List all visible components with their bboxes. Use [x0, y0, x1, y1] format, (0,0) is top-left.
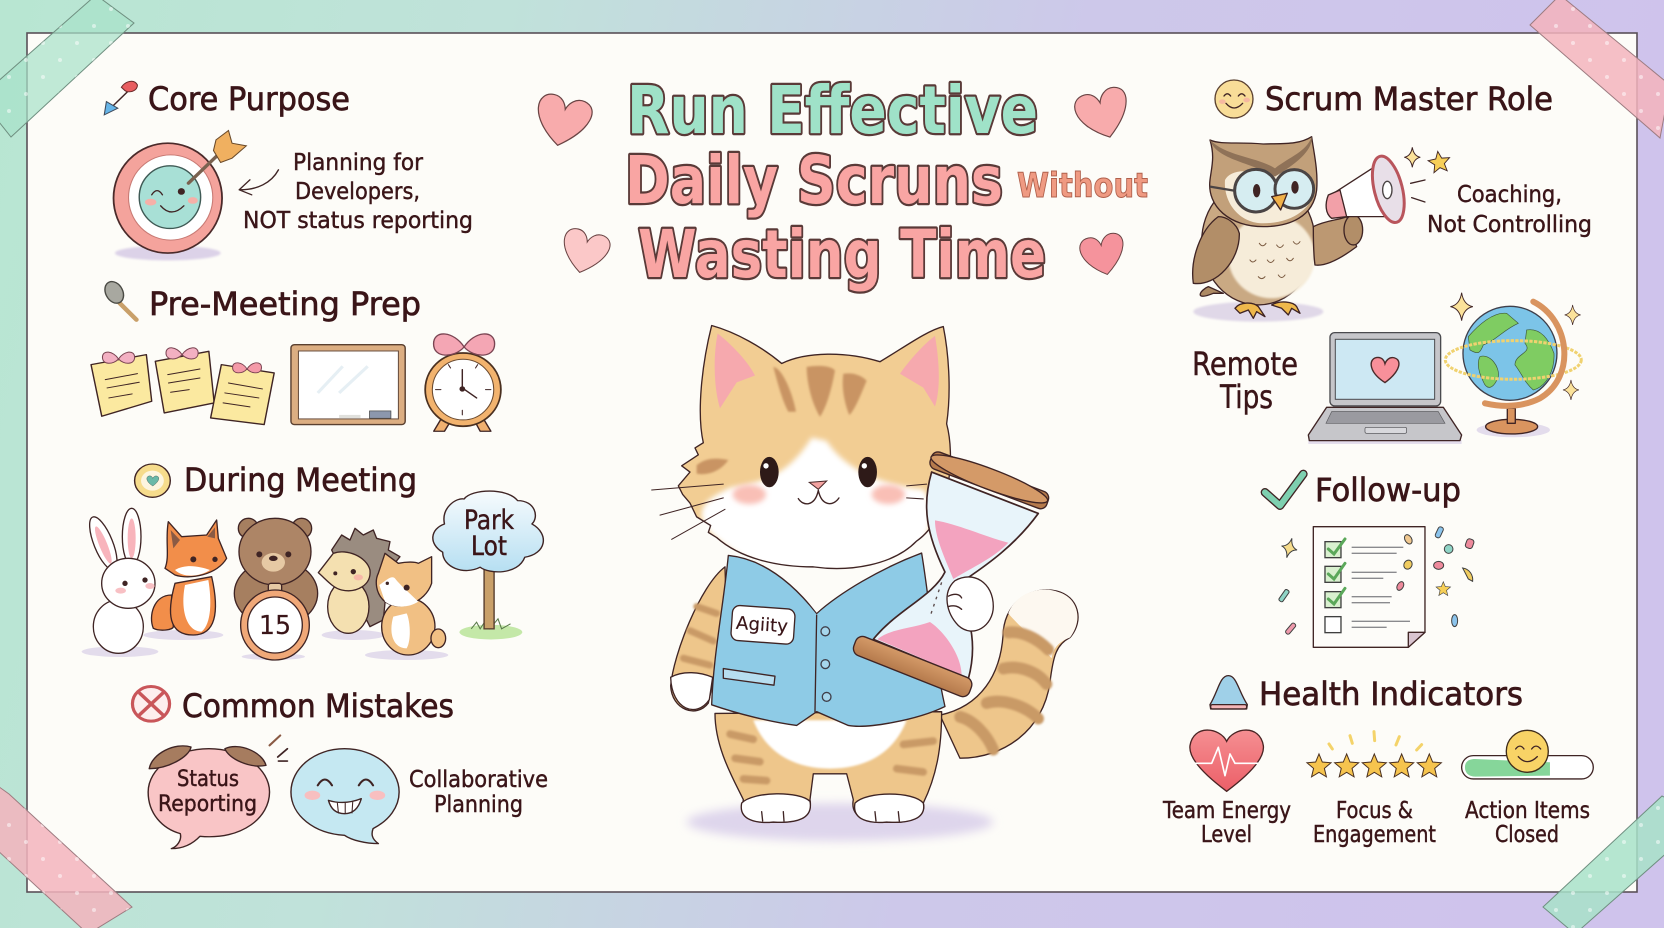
icon: arrow	[104, 81, 137, 115]
blue vest	[712, 553, 945, 726]
icon: heart with pulse	[1190, 730, 1263, 791]
name tag: Agility	[731, 605, 795, 645]
text: collaborative planning: Planning	[434, 792, 523, 818]
heading: Follow-up: Follow-up	[1315, 471, 1461, 509]
owl head	[1210, 137, 1317, 227]
panel: pre-meeting prep	[91, 279, 501, 431]
panel: common mistakes	[132, 686, 548, 849]
arrow pointer	[239, 170, 278, 195]
text: coaching not controlling	[1427, 182, 1592, 238]
glasses	[1235, 169, 1277, 212]
text: planning for developers: Planning for	[293, 150, 424, 176]
heading: Health Indicators: Health Indicators	[1259, 675, 1523, 713]
animals group with stopwatch	[82, 508, 448, 660]
sticky notes	[91, 348, 274, 425]
speech bubble: status reporting	[148, 735, 287, 849]
title word: Without: Without	[1017, 166, 1148, 206]
main character: cat with vest and hourglass	[652, 326, 1078, 841]
confetti	[1278, 526, 1475, 635]
text: planning for developers: Developers,	[295, 179, 420, 205]
vest buttons	[821, 627, 831, 701]
whiskers	[652, 484, 927, 539]
bear	[234, 518, 318, 627]
checklist	[1313, 527, 1425, 647]
stopwatch 15	[241, 583, 309, 660]
heading: During Meeting: During Meeting	[184, 461, 417, 499]
icon: five stars	[1307, 732, 1441, 777]
speech bubble: happy face	[291, 749, 399, 844]
text: coaching not controlling: Coaching,	[1457, 182, 1562, 208]
heading: Common Mistakes: Common Mistakes	[182, 687, 454, 725]
labels: team energy, focus, action items: Closed	[1495, 822, 1559, 848]
cat tail	[940, 590, 1078, 758]
washi tape: bottom right	[1543, 796, 1664, 928]
cat paw on hourglass	[947, 577, 993, 631]
panel: scrum master role	[1193, 80, 1592, 322]
icon: prohibited x	[132, 686, 170, 721]
small cat	[376, 553, 446, 655]
cat body and legs	[715, 712, 942, 822]
text: coaching not controlling: Not Controlling	[1427, 212, 1592, 238]
cat head	[652, 326, 950, 572]
heading: Remote Tips: Tips	[1219, 378, 1273, 416]
icon: bell shape	[1210, 676, 1247, 709]
laptop	[1308, 333, 1462, 444]
hedgehog	[318, 528, 400, 633]
panel: during meeting	[82, 461, 543, 660]
stopwatch number: 15	[259, 610, 291, 640]
heading: Remote Tips	[1192, 345, 1298, 416]
title line: Run Effective: Run Effective	[627, 72, 1038, 149]
washi tape: top left	[0, 0, 134, 137]
heading: Scrum Master Role: Scrum Master Role	[1265, 80, 1553, 118]
panel: health indicators	[1162, 675, 1593, 848]
icon: smiley	[1215, 80, 1253, 118]
washi tape: top right	[1530, 0, 1664, 138]
text: park lot	[464, 505, 514, 562]
icon: heart badge	[135, 464, 170, 497]
vest pocket	[723, 669, 775, 685]
icon: spoon	[101, 279, 136, 320]
title	[625, 72, 1148, 293]
megaphone	[1328, 163, 1395, 217]
park lot sign	[433, 491, 543, 639]
heading: Core Purpose: Core Purpose	[148, 80, 350, 118]
text: status reporting: Status	[177, 767, 239, 792]
text: collaborative planning	[409, 767, 548, 818]
owl belly feathers	[1250, 242, 1300, 279]
alarm clock	[425, 334, 501, 431]
heading: Remote Tips: Remote	[1192, 345, 1298, 383]
panel: core purpose	[104, 80, 473, 260]
labels: team energy, focus, action items: Focus &	[1336, 798, 1413, 824]
text: planning for developers	[243, 150, 473, 234]
labels: team energy, focus, action items	[1162, 798, 1590, 848]
text: collaborative planning: Collaborative	[409, 767, 548, 793]
panel: follow-up	[1265, 471, 1475, 647]
animal shadows	[82, 630, 448, 660]
cat left arm	[671, 567, 727, 711]
rabbit	[84, 508, 155, 653]
name tag: Agility: Agiity	[735, 613, 789, 638]
text: park lot: Lot	[471, 531, 507, 562]
globe	[1445, 293, 1581, 437]
icon: target with smile	[114, 131, 246, 260]
owl with megaphone	[1193, 137, 1451, 322]
washi tape: bottom left	[0, 784, 132, 928]
heading: Pre-Meeting Prep: Pre-Meeting Prep	[149, 285, 421, 323]
title line: Wasting Time: Wasting Time	[638, 216, 1046, 293]
hourglass	[851, 447, 1051, 699]
decorative hearts	[531, 84, 1135, 279]
labels: team energy, focus, action items: Action Items	[1465, 798, 1590, 824]
labels: team energy, focus, action items: Level	[1201, 822, 1252, 848]
head stripes	[697, 366, 867, 474]
text: park lot: Park	[464, 505, 514, 536]
icon: progress bar with smile	[1462, 730, 1593, 779]
ground shadow	[687, 803, 993, 841]
fox	[152, 520, 227, 635]
face	[760, 457, 779, 487]
text: status reporting	[158, 767, 257, 817]
text: status reporting: Reporting	[158, 792, 257, 817]
owl feet	[1235, 302, 1300, 318]
whiteboard	[291, 345, 405, 425]
text: planning for developers: NOT status reporting	[243, 208, 473, 234]
labels: team energy, focus, action items: Engagement	[1313, 822, 1436, 848]
panel: remote tips	[1192, 293, 1581, 444]
labels: team energy, focus, action items: Team Energy	[1162, 798, 1291, 824]
title line: Daily Scruns: Daily Scruns	[625, 142, 1003, 219]
icon: check mark	[1265, 474, 1303, 506]
